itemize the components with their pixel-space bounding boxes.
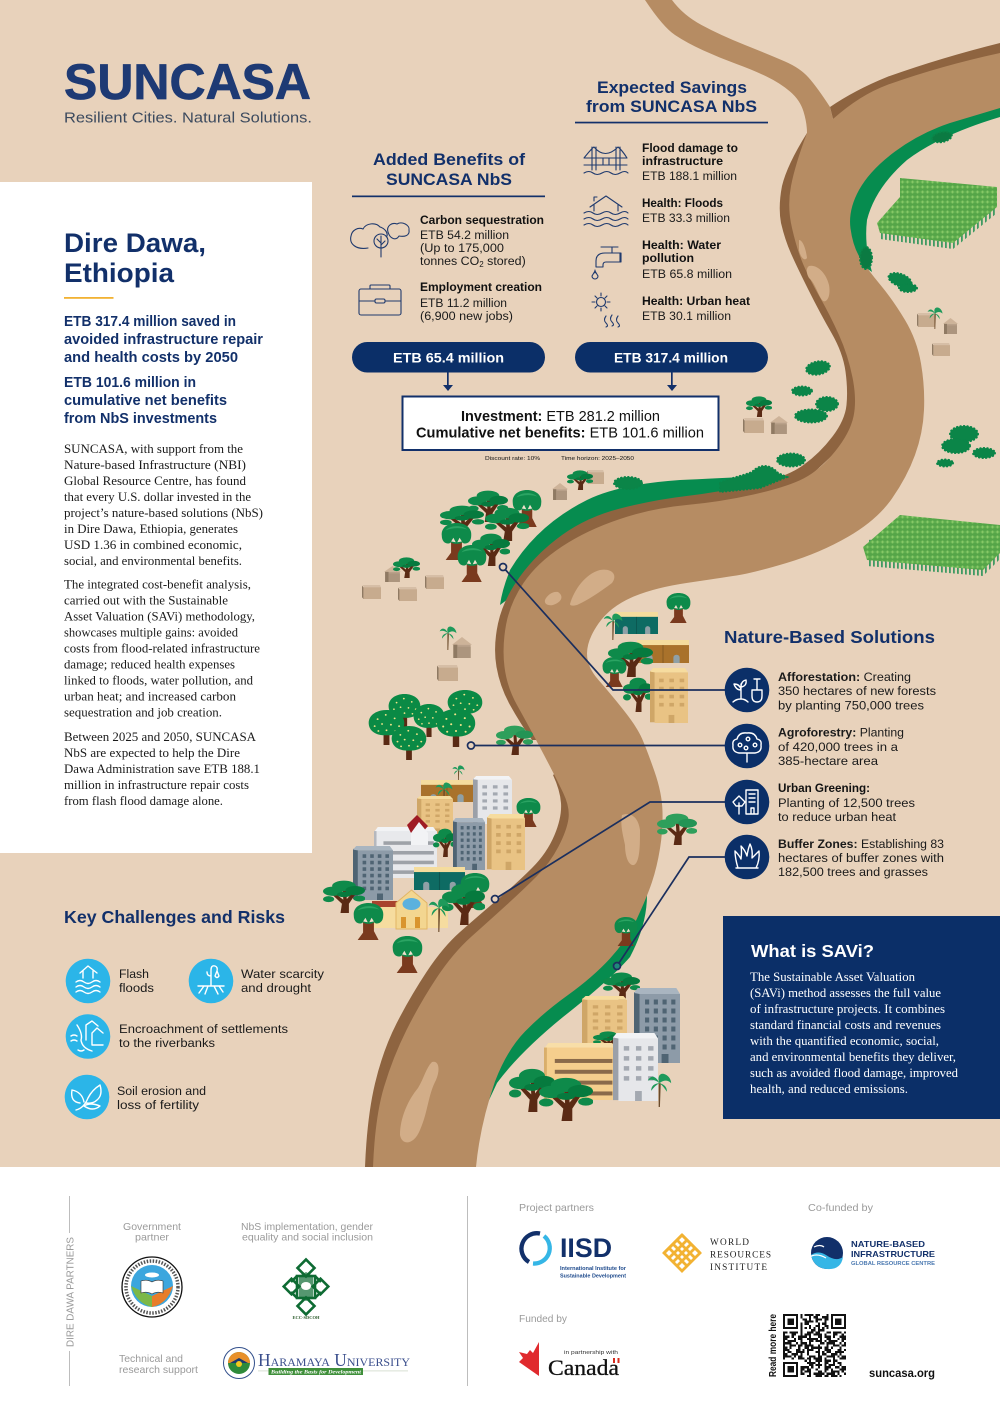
footer: white band [0, 1167, 1000, 1416]
heading: Nature-Based Solutions [724, 627, 935, 647]
panel: What is SAVi: What is SAVi? [751, 941, 874, 961]
icon: cloud and tree [351, 223, 409, 257]
flash floods [66, 959, 154, 1003]
panel: What is SAVi: health, and reduced emissions. [750, 1082, 908, 1096]
footer: technical and research support [119, 1348, 410, 1378]
icon: house in flood [584, 196, 628, 226]
body text: NbS are expected to help the Dire [64, 746, 241, 760]
body text: showcases multiple gains: avoided [64, 626, 239, 640]
text: health floods [642, 196, 730, 225]
body text: Asset Valuation (SAVi) methodology, [64, 610, 255, 624]
heading [586, 78, 757, 116]
logo: Nature-Based Infrastructure: GLOBAL RESOURCE CENTRE [851, 1261, 935, 1267]
body text: project’s nature-based solutions (NbS) [64, 506, 263, 520]
text: flood damage [642, 141, 738, 183]
body text: Nature-based Infrastructure (NBI) [64, 458, 246, 472]
logo: Nature-Based Infrastructure: INFRASTRUCTURE [851, 1249, 935, 1259]
buffer zones item: 182,500 trees and grasses [778, 865, 928, 879]
QR code block: suncasa.org [869, 1366, 935, 1380]
arrow [667, 372, 677, 391]
urban greening item: Planting of 12,500 trees [778, 796, 915, 810]
logo: IISD: IISD [560, 1233, 612, 1263]
text: employment creation: ETB 11.2 million [420, 296, 507, 310]
pill: ETB 65.4 million: ETB 65.4 million [393, 350, 504, 366]
body text: USD 1.36 in combined economic, [64, 538, 242, 552]
body text: from flash flood damage alone. [64, 794, 223, 808]
title: Ethiopia [64, 258, 174, 288]
pill: ETB 317.4 million [575, 342, 768, 372]
footer: co-funded by: Co-funded by [808, 1203, 874, 1214]
encroachment: to the riverbanks [119, 1036, 215, 1050]
logo: Haramaya University: Haramaya University [258, 1350, 410, 1370]
logo: World Resources Institute: INSTITUTE [710, 1263, 767, 1273]
heading: SUNCASA NbS [386, 170, 512, 189]
footer: funded by [519, 1314, 620, 1380]
water scarcity: and drought [241, 981, 312, 995]
footer: NbS implementation partner: equality and social inclusion [242, 1232, 373, 1244]
callout: investment and net benefits: Cumulative net benefits: ETB 101.6 million [416, 424, 704, 442]
text: carbon sequestration: (Up to 175,000 [420, 241, 504, 255]
body text: costs from flood-related infrastructure [64, 642, 261, 656]
water scarcity: Water scarcity [241, 967, 325, 981]
agroforestry item: 385-hectare area [778, 754, 878, 768]
panel: Key Challenges and Risks [64, 907, 325, 1119]
panel: What is SAVi: standard financial costs and revenues [750, 1018, 941, 1032]
soil erosion [65, 1075, 206, 1119]
logo: SUNCASA: SUNCASA [64, 54, 311, 110]
text: carbon sequestration: Carbon sequestration [420, 213, 544, 227]
panel: What is SAVi: The Sustainable Asset Valuation [750, 970, 915, 984]
soil erosion: Soil erosion and [117, 1084, 206, 1098]
text: health water: ETB 65.8 million [642, 267, 732, 281]
body text: urban heat; and increased carbon [64, 690, 236, 704]
plantation: lower field [863, 515, 1000, 576]
logo: Canada: Canada [548, 1355, 619, 1380]
text: health urban heat [642, 294, 750, 323]
text: carbon sequestration: tonnes CO [420, 254, 479, 268]
huts right of river [917, 307, 958, 356]
afforestation item: Afforestation: Creating [778, 670, 911, 684]
key figures: from NbS investments [64, 411, 217, 427]
logo: Haramaya University [224, 1348, 410, 1378]
footer: technical and research support: Technical and [119, 1354, 183, 1365]
text: health water: pollution [642, 251, 694, 265]
footer: funded by: Funded by [519, 1314, 568, 1325]
inner bend buildings [603, 593, 690, 723]
afforestation item: by planting 750,000 trees [778, 698, 924, 712]
huts and tree near centre [743, 396, 788, 434]
arrow [443, 372, 453, 391]
panel: What is SAVi: (SAVi) method assesses the full value [750, 986, 942, 1000]
text: health floods: Health: Floods [642, 196, 723, 210]
panel: What is SAVi: such as avoided flood damage, improved [750, 1066, 959, 1080]
plantation: upper field [877, 178, 997, 249]
footer: project partners [519, 1203, 771, 1280]
afforestation trees [440, 470, 604, 582]
urban greening item: Urban Greening: [778, 781, 870, 795]
urban greening item: to reduce urban heat [778, 810, 897, 824]
body text: in Dire Dawa, Ethiopia, generates [64, 522, 238, 536]
callout: investment and net benefits: Investment: ETB 281.2 million [461, 408, 660, 425]
key figures: and health costs by 2050 [64, 350, 238, 366]
key figures: avoided infrastructure repair [64, 332, 263, 348]
text: flood damage: infrastructure [642, 154, 723, 168]
body text: The integrated cost-benefit analysis, [64, 578, 251, 592]
footer: technical and research support: research support [119, 1365, 198, 1376]
footer: NbS implementation partner: NbS implementation, gender [241, 1222, 374, 1233]
logo: IISD: Sustainable Development [560, 1274, 626, 1280]
connector lines [468, 564, 725, 970]
footer: co-funded by [808, 1203, 935, 1269]
text: employment creation [420, 280, 542, 323]
body text: social, and environmental benefits. [64, 554, 242, 568]
icon: sun and heat [592, 293, 620, 327]
text: flood damage: ETB 188.1 million [642, 169, 737, 183]
encroachment: Encroachment of settlements [119, 1022, 288, 1036]
footer: project partners: Project partners [519, 1203, 594, 1214]
agroforestry item: of 420,000 trees in a [778, 740, 898, 754]
body text: damage; reduced health expenses [64, 658, 235, 672]
key figures: ETB 101.6 million in [64, 375, 196, 391]
QR code block [768, 1314, 935, 1380]
panel: Dire Dawa summary [0, 182, 312, 853]
agroforestry item: Agroforestry: Planting [778, 726, 904, 740]
heading [373, 150, 525, 189]
text: health water: Health: Water [642, 238, 721, 252]
body text: Dawa Administration save ETB 188.1 [64, 762, 260, 776]
bushes and grass [614, 130, 995, 492]
pill: ETB 317.4 million: ETB 317.4 million [614, 350, 728, 366]
footer: government partner: Government [123, 1222, 181, 1233]
logo: World Resources Institute [664, 1235, 771, 1273]
text: flood damage: Flood damage to [642, 141, 738, 155]
text: carbon sequestration: stored) [484, 254, 526, 268]
urban greening item [725, 780, 915, 824]
pill: ETB 65.4 million [352, 342, 545, 372]
flash floods: Flash [119, 967, 149, 981]
buffer zones item: hectares of buffer zones with [778, 851, 944, 865]
title: Dire Dawa, [64, 228, 206, 258]
panel: Nature-Based Solutions [724, 627, 944, 879]
logo: World Resources Institute: WORLD [710, 1238, 749, 1248]
buffer zones item: Buffer Zones: Establishing 83 [778, 837, 944, 851]
note: assumptions: Time horizon: 2025–2050 [561, 456, 634, 462]
title [64, 228, 206, 288]
logo: World Resources Institute: RESOURCES [710, 1250, 771, 1260]
afforestation item: 350 hectares of new forests [778, 684, 936, 698]
soil erosion: loss of fertility [117, 1098, 200, 1112]
urban greening city [323, 765, 540, 973]
logo: IISD [521, 1233, 627, 1280]
icon: bridge [584, 147, 628, 174]
logo: IISD: International Institute for [560, 1266, 627, 1272]
icon: tap [592, 247, 621, 279]
text: carbon sequestration [420, 213, 544, 269]
panel: What is SAVi: and environmental benefits they deliver, [750, 1050, 956, 1064]
text: health floods: ETB 33.3 million [642, 211, 730, 225]
logo: ECC-SDCOH cross: ECC-SDCOH [292, 1315, 320, 1320]
logo: Dire Dawa Administration seal [122, 1257, 182, 1317]
logo: Nature-Based Infrastructure [808, 1237, 935, 1269]
logo: Canada: in partnership with [564, 1350, 618, 1356]
buffer zones item [725, 835, 944, 879]
footer: government partner [122, 1222, 182, 1317]
agroforestry fruit trees [369, 690, 533, 760]
note: assumptions: Discount rate: 10% [485, 456, 540, 462]
tree on the right bank [657, 814, 697, 845]
body text: SUNCASA, with support from the [64, 442, 244, 456]
body text: sequestration and job creation. [64, 706, 222, 720]
panel: What is SAVi: with the quantified economic, social, [750, 1034, 939, 1048]
village left [362, 557, 472, 681]
heading: from SUNCASA NbS [586, 97, 757, 116]
body text: linked to floods, water pollution, and [64, 674, 254, 688]
note: assumptions [485, 456, 634, 462]
body text: carried out with the Sustainable [64, 594, 229, 608]
afforestation item [725, 668, 936, 712]
buffer zone buildings [509, 917, 680, 1121]
QR code block: Read more here [768, 1314, 779, 1377]
callout: investment and net benefits [402, 396, 718, 450]
agroforestry item [725, 724, 904, 768]
logo: Haramaya University: Building the Basis for Development [270, 1370, 362, 1376]
logo: Nature-Based Infrastructure: NATURE-BASED [851, 1239, 925, 1249]
icon: briefcase [359, 285, 401, 315]
key figures: cumulative net benefits [64, 393, 227, 409]
water scarcity [189, 959, 325, 1003]
body text: Global Resource Centre, has found [64, 474, 247, 488]
panel: What is SAVi: of infrastructure projects. It combines [750, 1002, 945, 1016]
flash floods: floods [119, 981, 154, 995]
body text: Between 2025 and 2050, SUNCASA [64, 730, 256, 744]
body text [64, 442, 263, 808]
text: carbon sequestration: ETB 54.2 million [420, 228, 509, 242]
heading: Expected Savings [597, 78, 747, 97]
heading: Key Challenges and Risks [64, 907, 285, 927]
heading: Added Benefits of [373, 150, 525, 169]
body text: million in infrastructure repair costs [64, 778, 249, 792]
encroachment [66, 1014, 288, 1059]
panel: What is SAVi [723, 916, 1000, 1119]
QR code [783, 1314, 846, 1377]
footer: NbS implementation partner [241, 1222, 374, 1320]
logo: Canada [519, 1342, 620, 1380]
footer: government partner: partner [135, 1232, 170, 1244]
logo: SUNCASA: Resilient Cities. Natural Solutions. [64, 110, 312, 126]
river [365, 0, 1000, 1167]
key figures [64, 314, 263, 427]
text: employment creation: Employment creation [420, 280, 542, 294]
panel: added benefits [351, 150, 545, 391]
text: carbon sequestration: 2 [479, 260, 484, 269]
panel: expected savings [575, 78, 768, 391]
key figures: ETB 317.4 million saved in [64, 314, 236, 330]
body text: that every U.S. dollar invested in the [64, 490, 252, 504]
text: employment creation: (6,900 new jobs) [420, 309, 513, 323]
text: health urban heat: ETB 30.1 million [642, 309, 731, 323]
text: health urban heat: Health: Urban heat [642, 294, 750, 308]
footer: Dire Dawa partners label: DIRE DAWA PARTNERS [64, 1237, 76, 1347]
text: health water [642, 238, 732, 281]
